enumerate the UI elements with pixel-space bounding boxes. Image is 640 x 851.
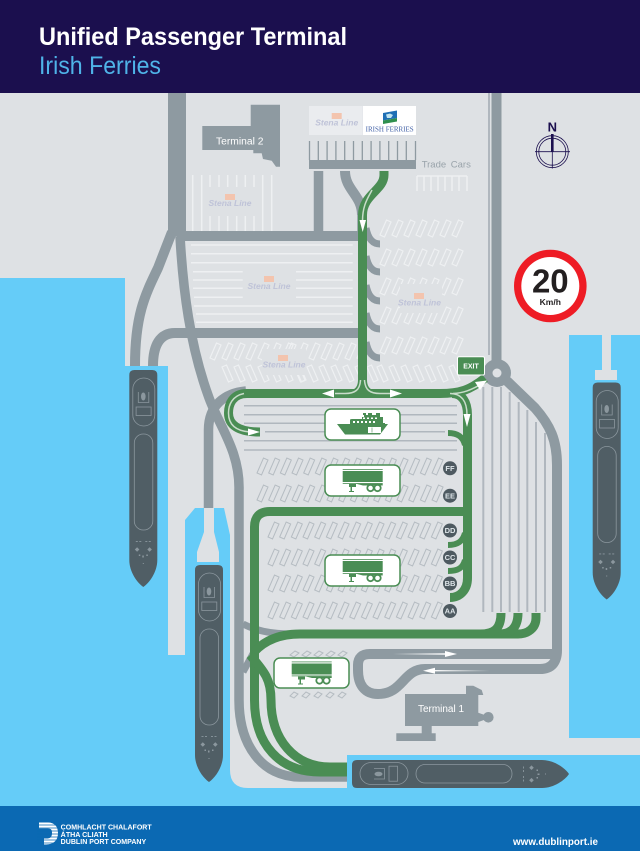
stena line parking labels (209, 194, 441, 370)
speed limit sign: Km/h (540, 297, 561, 307)
lane labels: BB (445, 579, 456, 588)
footer band (0, 806, 640, 851)
logo: Stena Line panel (309, 106, 363, 135)
route arrows (228, 190, 490, 674)
speed limit sign: 20 (532, 263, 569, 300)
exit sign (458, 357, 484, 375)
exit sign: EXIT (463, 364, 480, 370)
subtitle: Irish Ferries (39, 52, 161, 80)
piers (197, 335, 617, 562)
logo: Irish Ferries panel (363, 106, 416, 135)
terminal 2: Terminal 2 (216, 136, 264, 148)
grey ferry lane lines (244, 387, 545, 612)
speed limit sign (514, 250, 587, 322)
header band (0, 0, 640, 93)
title: Unified Passenger Terminal (39, 23, 347, 51)
footer company name: DUBLIN PORT COMPANY (61, 839, 147, 846)
terminal 1: Terminal 1 (418, 704, 464, 715)
lane labels: CC (445, 553, 456, 562)
stena line parking labels: Stena Line (263, 360, 306, 370)
ship: left berth (129, 370, 157, 587)
lane labels: AA (445, 607, 456, 616)
grey spurs off main lane (366, 228, 380, 358)
water basins (0, 278, 640, 806)
icon box: freight trailer (upper) (325, 465, 400, 496)
lane labels (443, 461, 457, 618)
logo: Stena Line panel: Stena Line (315, 118, 358, 128)
icon box: freight trailer (middle) (325, 555, 400, 586)
lane labels: DD (445, 526, 456, 535)
footer company name: ÁTHA CLIATH (61, 830, 108, 839)
trade cars label and berth comb: Trade Cars (422, 160, 471, 171)
roundabout (483, 359, 511, 387)
icon box: passenger ferry (325, 409, 400, 440)
north compass: N (548, 120, 557, 135)
icon box: freight trailer (lower) (274, 658, 349, 688)
logo: Irish Ferries panel: IRISH FERRIES (366, 126, 414, 134)
ship: right berth (593, 382, 621, 600)
footer logo mark (37, 825, 60, 843)
north compass (535, 120, 570, 168)
lane labels: FF (445, 464, 455, 473)
stena line parking labels: Stena Line (209, 198, 252, 208)
ship: middle berth (195, 565, 223, 782)
parking: upper white markings (191, 175, 467, 382)
stena line parking labels: Stena Line (398, 298, 441, 308)
stena line parking labels: Stena Line (248, 281, 291, 291)
terminal 1 (396, 686, 494, 741)
parking rows: freight (257, 458, 443, 698)
footer company name: COMHLACHT CHALAFORT (61, 824, 152, 832)
ship: bottom berth (352, 760, 569, 788)
footer website: www.dublinport.ie (512, 837, 598, 848)
trade cars label and berth comb (309, 141, 471, 171)
terminal 2 (202, 105, 280, 167)
lane labels: EE (445, 491, 455, 500)
grey road network (135, 93, 557, 777)
footer company name (61, 824, 152, 846)
green traffic route (228, 171, 536, 772)
